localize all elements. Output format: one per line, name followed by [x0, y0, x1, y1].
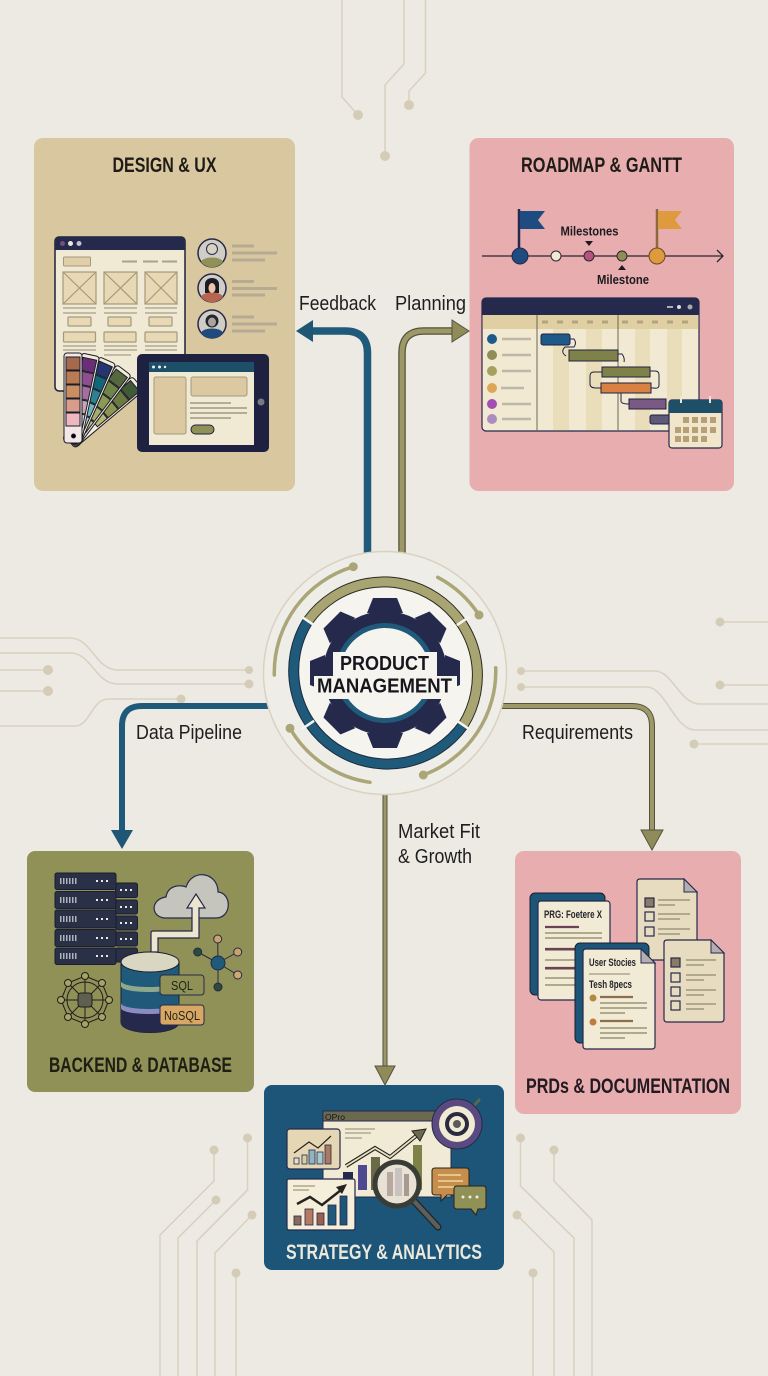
label: Requirements: Requirements — [522, 722, 633, 744]
label: Planning: Planning — [395, 293, 466, 315]
icon: cloud — [154, 875, 228, 918]
panel: design and UX — [34, 138, 295, 491]
icon: target — [432, 1099, 482, 1149]
heading: backend and database: BACKEND & DATABASE — [49, 1054, 232, 1077]
icon: orange speech bubble — [432, 1168, 469, 1201]
label: SQL: SQL — [171, 978, 193, 993]
user stories and tech specs document: Tesh 8pecs — [589, 979, 632, 991]
heading: roadmap and Gantt: ROADMAP & GANTT — [521, 154, 682, 177]
Gantt chart window — [482, 298, 699, 431]
central hub: product management gear — [264, 552, 506, 794]
label: Market Fit and Growth: & Growth — [398, 846, 472, 868]
icon: node network — [194, 935, 242, 991]
label: Market Fit and Growth — [398, 821, 480, 868]
arrow: requirements — [502, 706, 663, 850]
milestone timeline — [482, 209, 723, 287]
PRD document — [530, 893, 610, 1000]
icon: server rack — [55, 873, 138, 964]
title: product management: PRODUCT — [340, 652, 429, 675]
icon: upload arrow — [151, 894, 205, 952]
analytics dashboard window — [323, 1111, 451, 1197]
user stories and tech specs document: User Stocies — [589, 957, 636, 969]
user stories and tech specs document — [575, 943, 655, 1049]
user personas — [198, 239, 277, 338]
panel: backend and database — [27, 851, 254, 1092]
icon: calendar — [669, 396, 722, 448]
label: Data Pipeline: Data Pipeline — [136, 722, 242, 744]
arrow: data pipeline — [111, 706, 268, 849]
arrow: feedback — [296, 320, 368, 553]
segmented ring — [294, 582, 477, 764]
outer accent arcs — [274, 562, 496, 782]
arrow: planning — [402, 320, 469, 553]
icon: olive speech bubble — [454, 1186, 486, 1215]
label: Market Fit and Growth: Market Fit — [398, 821, 480, 843]
label: NoSQL — [160, 1005, 204, 1025]
colour swatch fan — [63, 353, 144, 448]
icon: gear — [310, 598, 460, 748]
panel: strategy and analytics — [264, 1085, 504, 1270]
milestone timeline: Milestone — [597, 273, 649, 287]
analytics dashboard window: OPro — [325, 1113, 346, 1122]
bar and line chart — [287, 1179, 355, 1230]
checklist document top — [637, 879, 697, 960]
wireframe browser window — [55, 237, 185, 391]
arrow: market fit and growth — [375, 795, 395, 1085]
title: product management — [317, 652, 452, 698]
title: product management: MANAGEMENT — [317, 674, 452, 698]
PRD document: PRG: Foetere X — [544, 909, 602, 921]
milestone timeline: Milestones — [560, 224, 619, 238]
heading: design and UX: DESIGN & UX — [112, 154, 216, 177]
icon: database cylinder — [121, 952, 179, 1032]
label: NoSQL: NoSQL — [164, 1008, 200, 1023]
checklist document bottom — [664, 940, 724, 1022]
heading: strategy and analytics: STRATEGY & ANALYTICS — [286, 1241, 482, 1264]
label: SQL — [160, 975, 204, 995]
panel: PRDs and documentation — [515, 851, 741, 1114]
icon: database mesh — [58, 972, 112, 1028]
panel: roadmap and Gantt — [470, 138, 734, 491]
icon: magnifying glass — [375, 1162, 438, 1227]
tablet mockup — [137, 354, 269, 452]
label: Feedback: Feedback — [299, 293, 377, 315]
small trend chart — [287, 1129, 340, 1169]
